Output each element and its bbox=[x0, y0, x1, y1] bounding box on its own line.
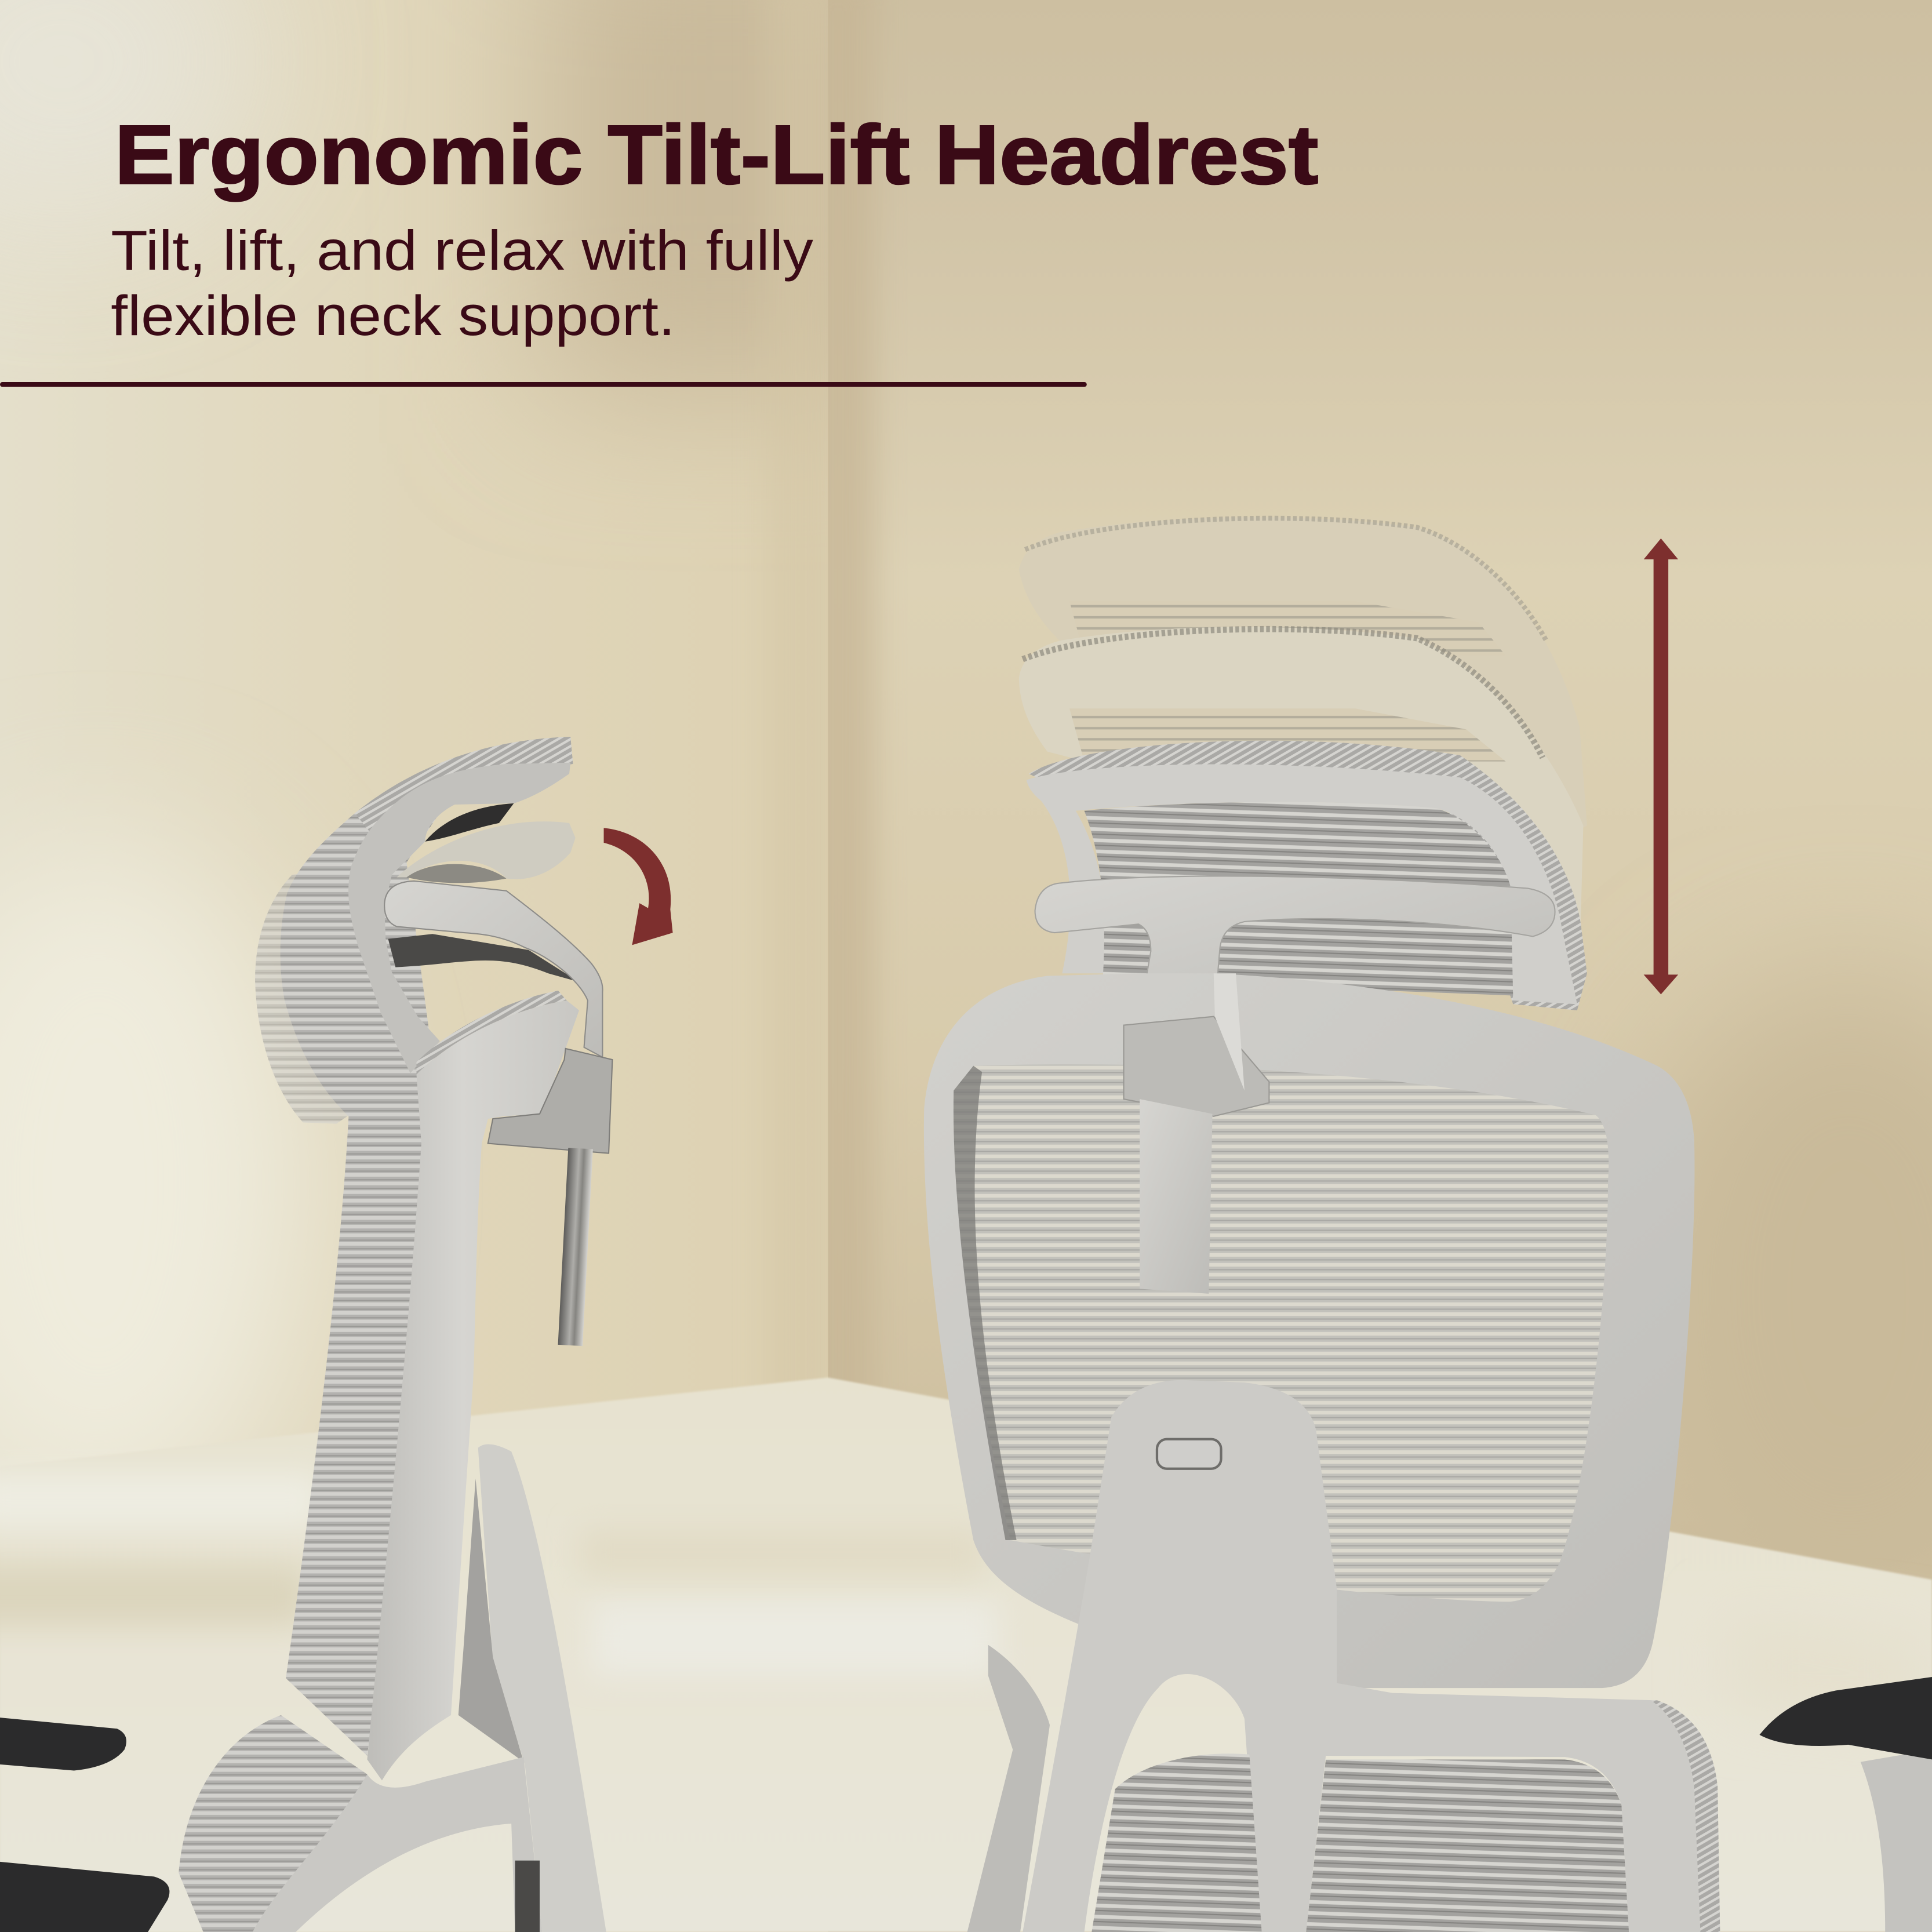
left chair: side view bbox=[0, 737, 612, 1932]
right chair: back view bbox=[924, 517, 1720, 1932]
slot badge bbox=[1157, 1439, 1221, 1469]
divider line bbox=[0, 382, 1087, 387]
seat edge mesh bbox=[1651, 1700, 1720, 1932]
headrest inner mesh bbox=[1085, 802, 1513, 996]
adjustment rod bbox=[558, 1148, 593, 1346]
tilt arrow bbox=[604, 828, 673, 945]
subtitle: Tilt, lift, and relax with fully bbox=[111, 219, 813, 282]
lift arrow bbox=[1644, 539, 1678, 994]
back mesh panel bbox=[954, 1064, 1609, 1602]
headrest mesh bbox=[281, 737, 573, 1126]
lower dark gap bbox=[515, 1861, 540, 1932]
back frame bbox=[924, 973, 1694, 1688]
seat mesh bbox=[179, 1715, 372, 1932]
height clamp collar bbox=[1124, 1017, 1269, 1116]
height stalk bbox=[1140, 1099, 1213, 1294]
ghost headrest: top position bbox=[1019, 517, 1587, 850]
bottom strut bbox=[478, 1444, 606, 1932]
tilt-lift T arm bbox=[1035, 876, 1555, 1023]
black armrests bbox=[0, 1718, 169, 1932]
subtitle: flexible neck support. bbox=[111, 283, 675, 347]
lower frame bbox=[253, 1757, 542, 1932]
dark bracket underside bbox=[388, 934, 579, 982]
frame step bbox=[1214, 973, 1245, 1090]
seat-back shadow bbox=[967, 1645, 1050, 1932]
lower mesh left bbox=[1091, 1753, 1262, 1932]
spine frame bbox=[367, 1000, 579, 1781]
height clamp bbox=[488, 1049, 612, 1154]
title: Ergonomic Tilt-Lift Headrest bbox=[115, 108, 1318, 202]
headrest frame bbox=[1027, 765, 1577, 1004]
tilted ghost crescent bbox=[396, 821, 576, 879]
headrest frame crescent bbox=[348, 763, 570, 1073]
back frame inner shadow bbox=[954, 1066, 1017, 1540]
back spine mesh bbox=[286, 1060, 432, 1756]
dark slot bbox=[425, 803, 514, 842]
ghost headrest mesh bbox=[255, 863, 394, 1124]
subtitle bbox=[111, 219, 813, 347]
right armrest bbox=[1759, 1677, 1932, 1932]
headrest mesh bbox=[1029, 741, 1587, 1010]
tilt bracket arm bbox=[384, 881, 603, 1057]
ghost headrest: middle position bbox=[1019, 627, 1583, 961]
lower chair frame bbox=[1023, 1380, 1720, 1932]
lower mesh right bbox=[1306, 1759, 1629, 1932]
